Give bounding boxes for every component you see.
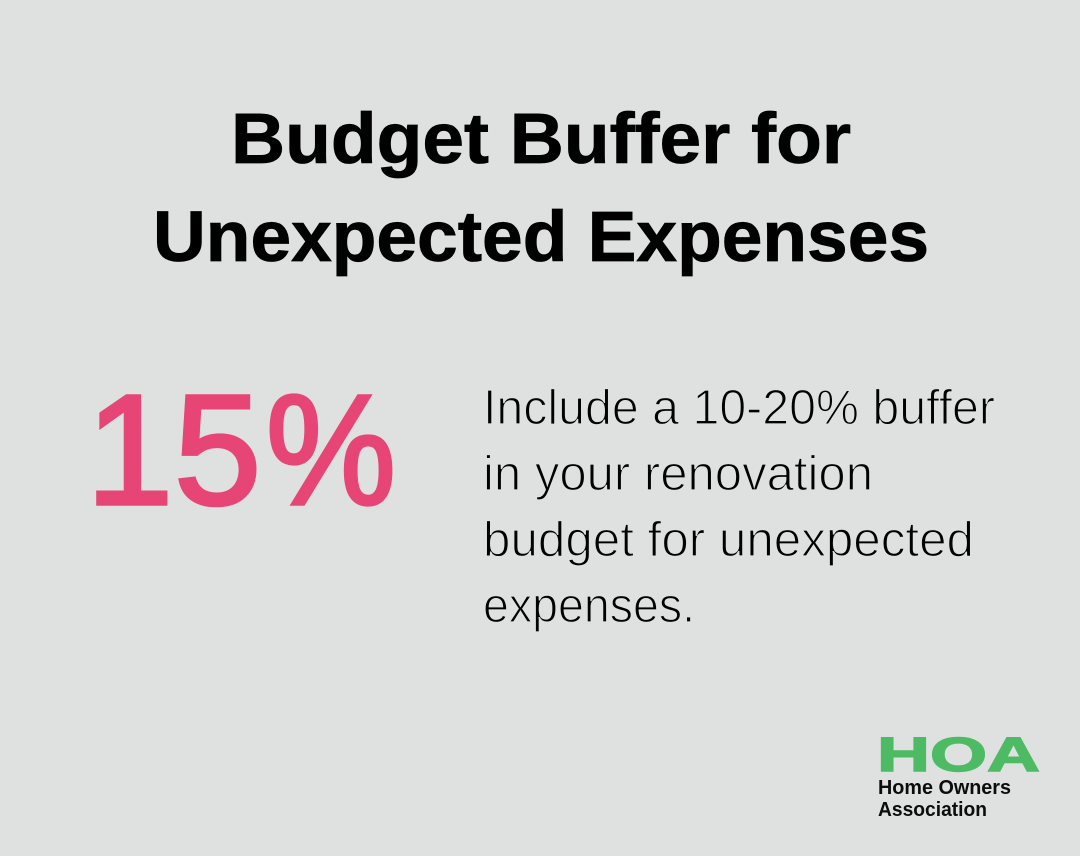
description text: Include a 10-20% buffer [483,381,995,435]
title [153,100,929,277]
big statistic: 15% [86,363,396,538]
title: Budget Buffer for [231,100,851,179]
description text [483,381,995,633]
title: Unexpected Expenses [153,198,929,277]
description text: budget for unexpected [483,513,974,567]
logo mark: HOA: HOA [877,729,1040,782]
description text: expenses. [483,579,695,633]
big statistic: 15%: % [266,363,396,538]
big statistic: 15%: 1 [86,363,173,538]
logo: Home Owners Association [877,729,1040,821]
logo wordmark: Home Owners [878,777,1011,799]
logo wordmark: Association [878,799,987,821]
description text: in your renovation [483,447,873,501]
logo wordmark [878,777,1011,821]
big statistic: 15%: 5 [174,363,261,538]
